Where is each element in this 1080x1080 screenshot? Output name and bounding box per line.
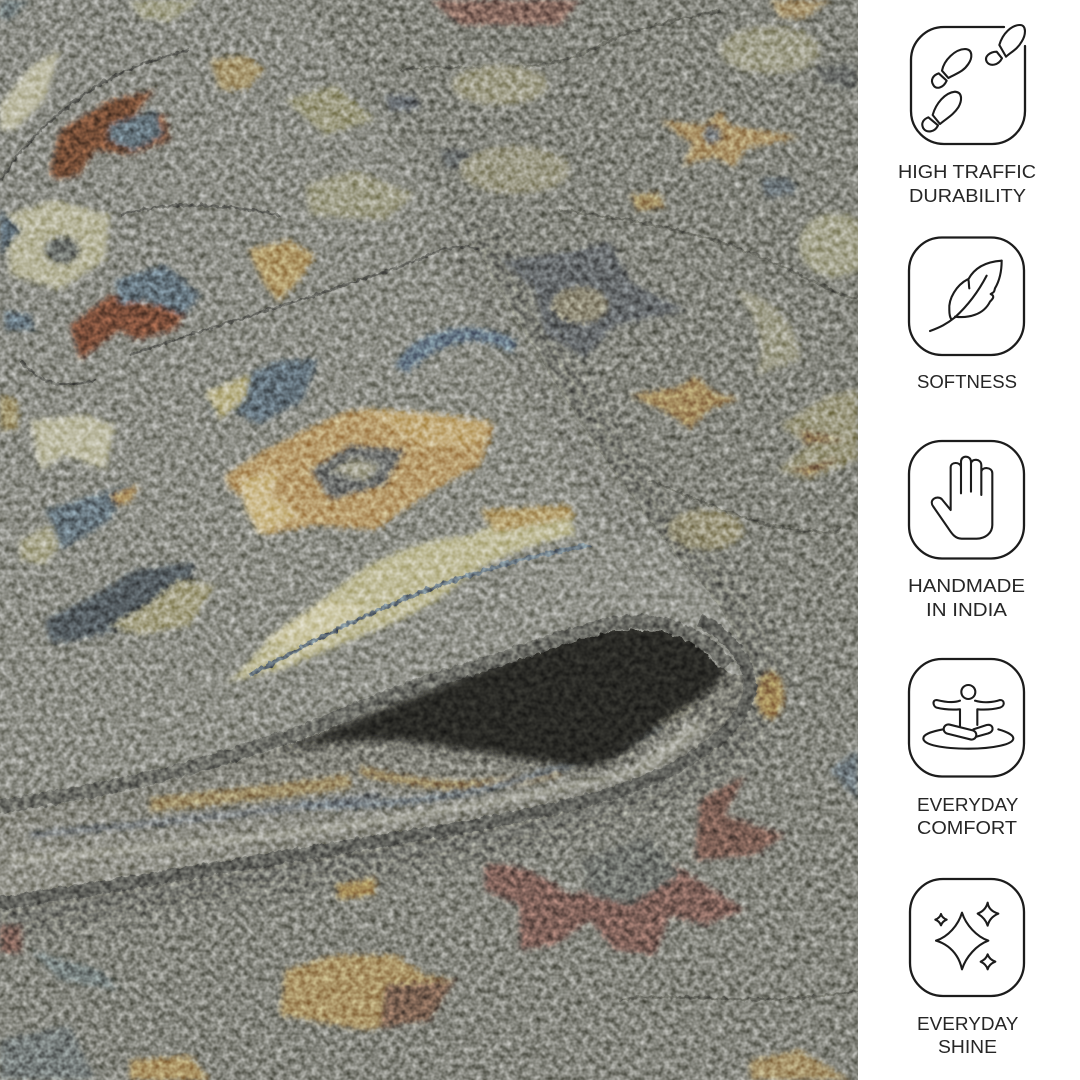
rug photo illustration bbox=[0, 0, 858, 1080]
feature: everyday shine bbox=[910, 879, 1024, 1057]
icon: rounded box with feather bbox=[909, 238, 1024, 355]
flap vein lines bbox=[0, 50, 590, 675]
white feature sidebar bbox=[898, 24, 1036, 1057]
label: handmade in india: IN INDIA bbox=[926, 599, 1008, 620]
label: handmade in india: HANDMADE bbox=[908, 575, 1025, 596]
rolled flap top surface bbox=[0, 0, 753, 816]
motifs on the flap bbox=[0, 0, 575, 682]
flap edge binding bbox=[0, 622, 728, 808]
label: high traffic durability: HIGH TRAFFIC bbox=[898, 161, 1036, 182]
shadow cast by the roll onto the back layer bbox=[0, 240, 768, 922]
icon: rounded box with meditating person bbox=[909, 659, 1024, 776]
label: everyday shine: SHINE bbox=[938, 1036, 997, 1057]
label: everyday comfort: EVERYDAY bbox=[917, 794, 1018, 815]
label: high traffic durability: DURABILITY bbox=[909, 185, 1026, 206]
icon: rounded box with sparkles bbox=[910, 879, 1024, 996]
feature: high traffic durability bbox=[898, 25, 1041, 206]
feature: handmade in india bbox=[908, 441, 1030, 620]
feature: softness bbox=[909, 238, 1024, 392]
dark shadow inside the fold bbox=[280, 610, 723, 768]
thick bound edge of the rug bbox=[0, 620, 750, 905]
label: everyday shine: EVERYDAY bbox=[917, 1013, 1018, 1034]
shaded ridge along the flap edge bbox=[440, 225, 640, 540]
icon: rounded box with hand bbox=[909, 441, 1024, 558]
label: everyday comfort: COMFORT bbox=[917, 817, 1017, 838]
label: softness: SOFTNESS bbox=[917, 371, 1017, 392]
underside of rug bbox=[0, 640, 753, 905]
icon: rounded box with footprints bbox=[911, 25, 1025, 144]
feature: everyday comfort bbox=[909, 659, 1024, 838]
